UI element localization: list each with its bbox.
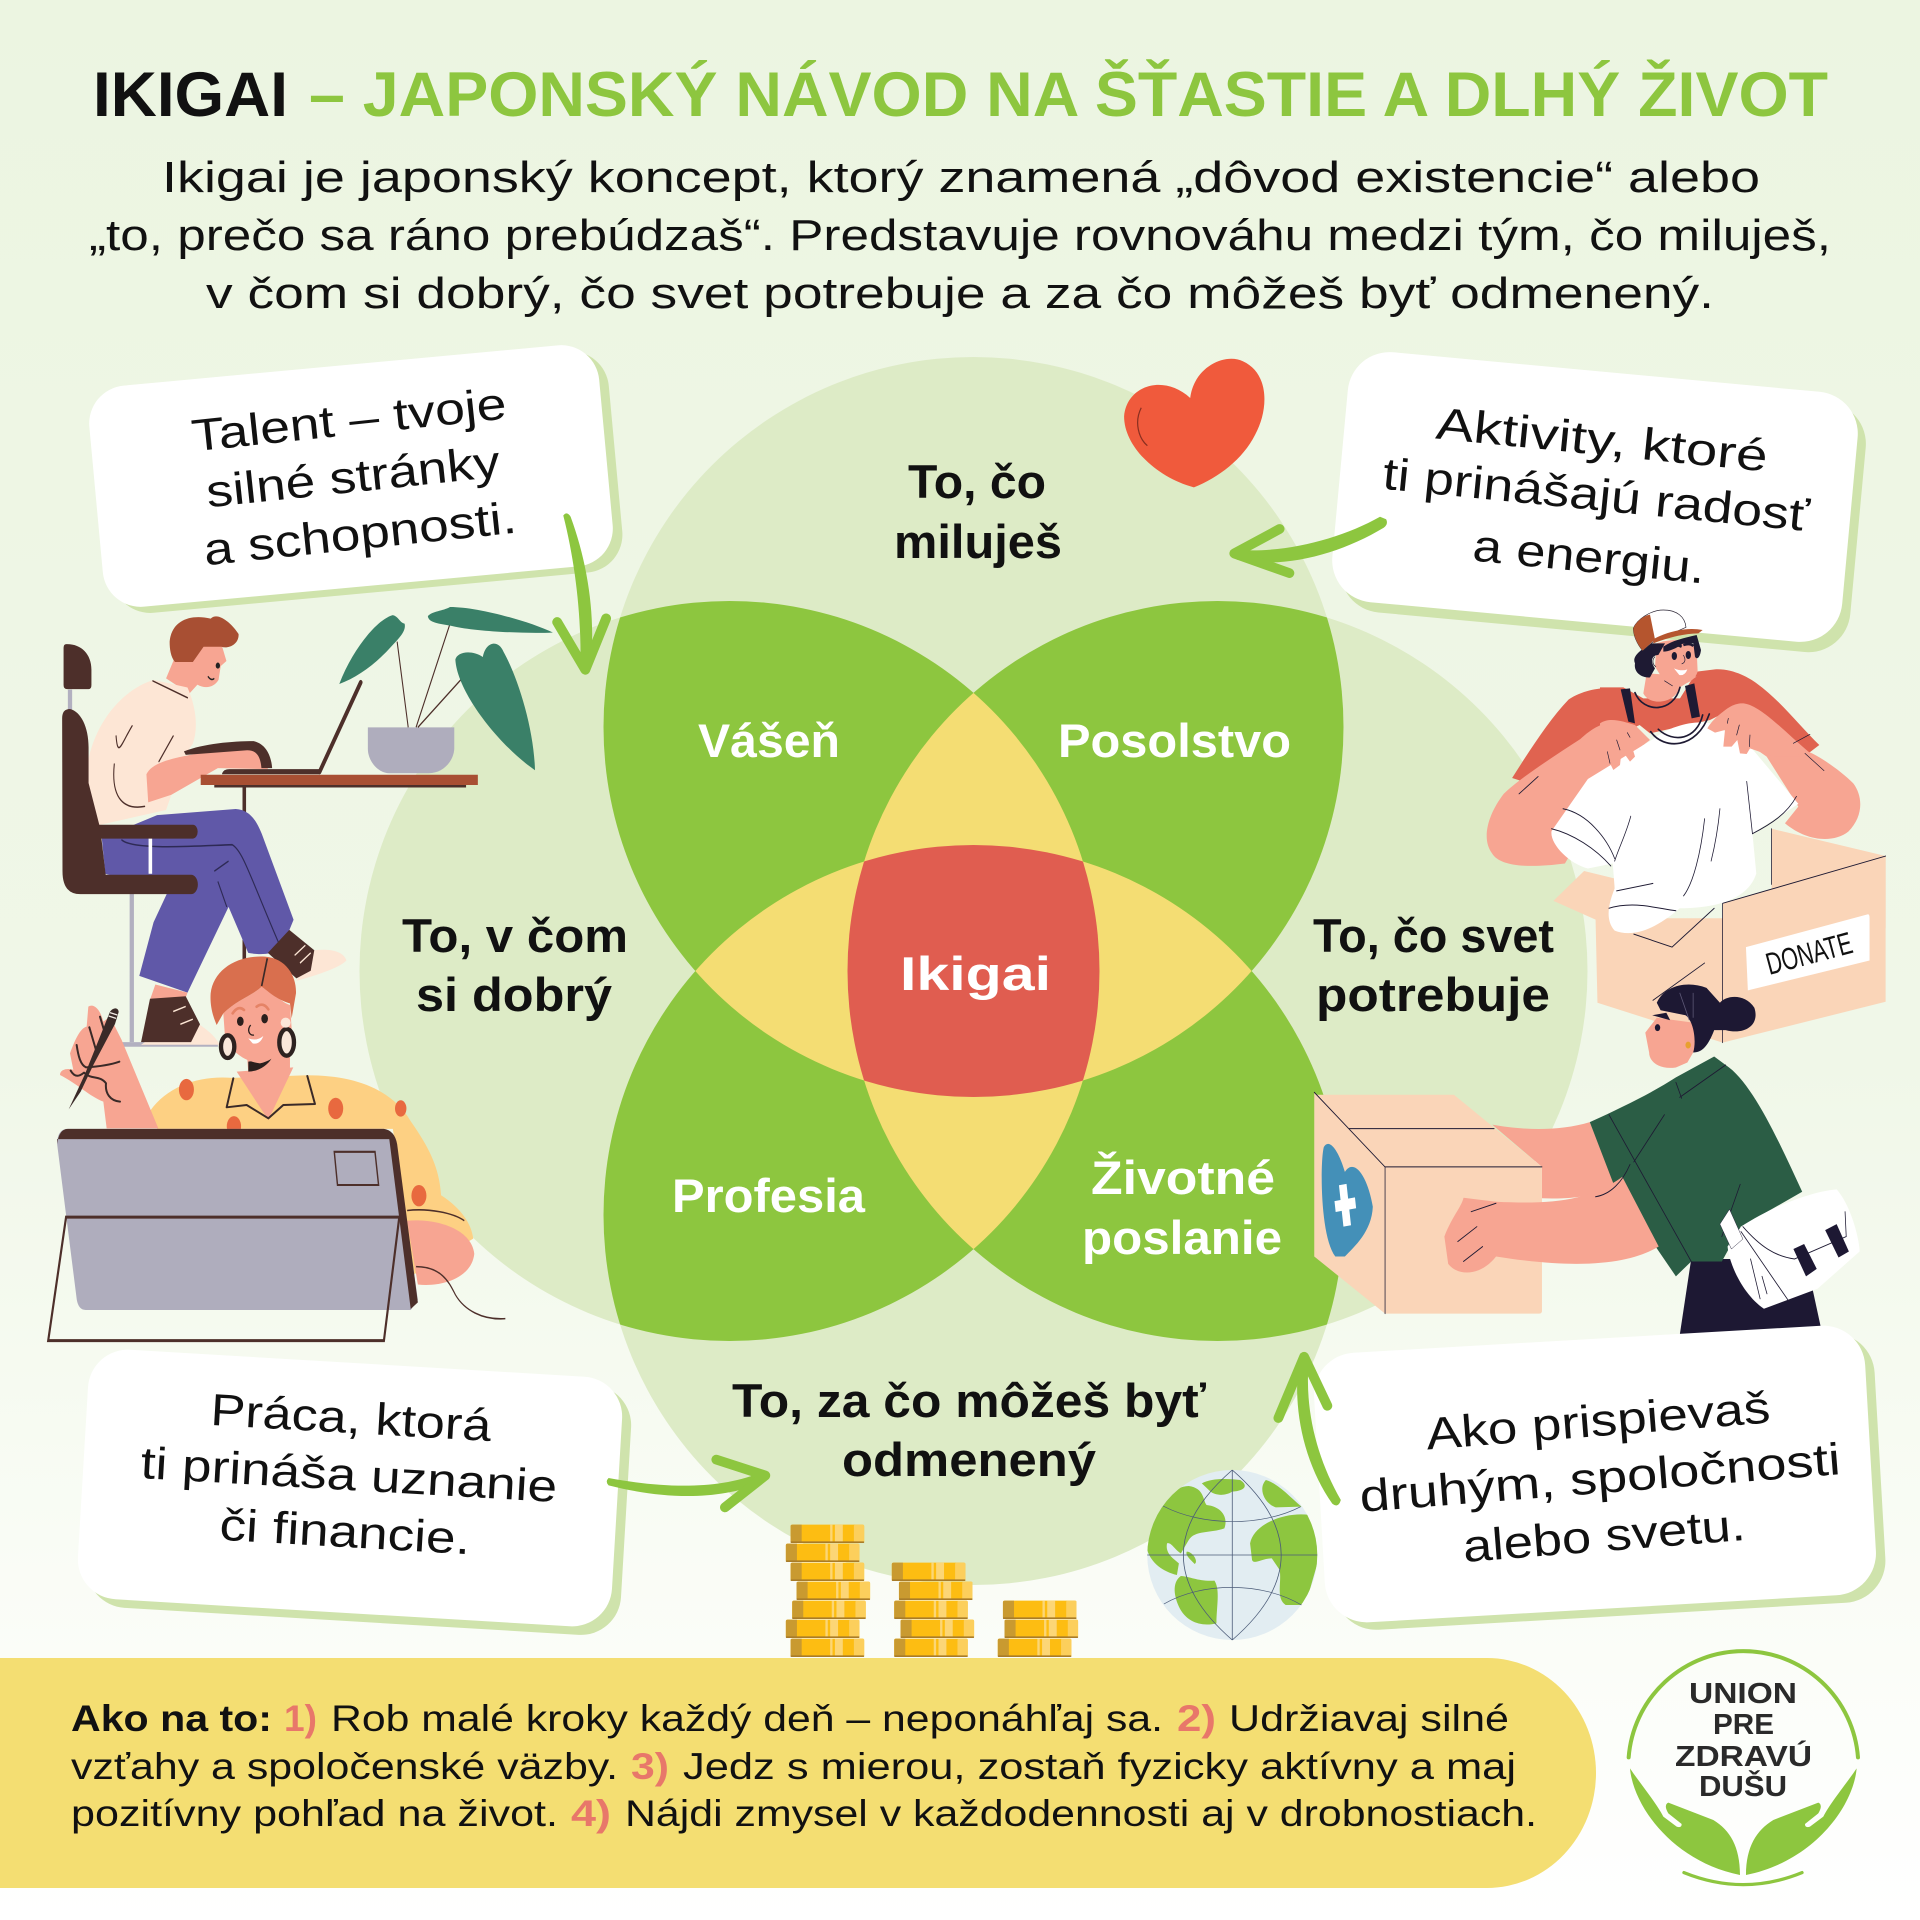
venn labels: To, v čom: [402, 909, 628, 962]
intro text: [89, 153, 1831, 318]
panel: tips: 3): [631, 1746, 669, 1787]
text: donate: DONATE: [1762, 925, 1856, 982]
illustration: head of man with cap: [1633, 610, 1703, 686]
venn labels: Vášeň: [698, 714, 840, 767]
intro text: Ikigai je japonský koncept, ktorý znamená „dôvod existencie“ alebo: [162, 153, 1760, 202]
intro text: v čom si dobrý, čo svet potrebuje a za čo môžeš byť odmenený.: [206, 269, 1714, 318]
venn labels: odmenený: [842, 1433, 1096, 1486]
panel: tips: Ako na to:: [71, 1698, 272, 1739]
arrow: activities: [1234, 517, 1387, 573]
card: contribution: Ako prispievaš: [1424, 1382, 1772, 1459]
logo: ZDRAVÚ: [1675, 1739, 1812, 1773]
panel: tips: Nájdi zmysel v každodennosti aj v drobnostiach.: [625, 1793, 1537, 1834]
icon: globe: [1147, 1470, 1321, 1640]
venn labels: Posolstvo: [1058, 714, 1291, 767]
icon: heart: [1124, 359, 1264, 487]
venn diagram: [360, 357, 1588, 1585]
card: work: Práca, ktorá: [209, 1384, 494, 1451]
card: talent: Talent – tvoje: [189, 378, 509, 461]
panel: tips: pozitívny pohľad na život.: [71, 1793, 558, 1834]
card: activities: ti prinášajú radosť: [1381, 448, 1813, 541]
card: work: [76, 1347, 633, 1637]
card: activities: [1329, 348, 1870, 656]
venn labels: miluješ: [894, 515, 1062, 568]
card: work: ti prináša uznanie: [139, 1437, 559, 1512]
logo: DUŠU: [1699, 1769, 1787, 1803]
logo: UNION: [1689, 1678, 1797, 1710]
venn labels: potrebuje: [1316, 968, 1550, 1021]
illustration: box with T-shirt and man: [1487, 669, 1886, 1043]
panel: tips: vzťahy a spoločenské väzby.: [71, 1746, 618, 1787]
arrow: talent: [557, 513, 606, 670]
venn labels: si dobrý: [416, 968, 612, 1021]
illustration: man at desk with plant: [62, 607, 553, 1047]
panel: tips: [0, 1658, 1596, 1888]
venn labels: Ikigai: [900, 947, 1051, 1000]
venn labels: poslanie: [1082, 1211, 1282, 1264]
card: contribution: alebo svetu.: [1461, 1499, 1747, 1572]
card: talent: [86, 342, 626, 616]
card: work: či financie.: [218, 1499, 472, 1564]
icon: coins: [786, 1525, 1078, 1657]
card: activities: a energiu.: [1471, 520, 1708, 593]
venn labels: Životné: [1091, 1151, 1275, 1204]
panel: tips: Rob malé kroky každý deň – neponáhľaj sa.: [331, 1698, 1163, 1739]
arrow: work: [607, 1460, 765, 1507]
venn labels: To, čo: [908, 455, 1046, 508]
arrow: contribution: [1278, 1357, 1341, 1505]
card: contribution: druhým, spoločnosti: [1358, 1433, 1842, 1522]
panel: tips: 2): [1177, 1698, 1216, 1739]
panel: tips: 4): [571, 1793, 611, 1834]
logo: [1629, 1651, 1858, 1885]
venn labels: To, čo svet: [1313, 909, 1554, 962]
illustration: woman with tablet: [48, 957, 505, 1341]
panel: tips: Udržiavaj silné: [1229, 1698, 1509, 1739]
intro text: „to, prečo sa ráno prebúdzaš“. Predstavuje rovnováhu medzi tým, čo miluješ,: [89, 211, 1831, 260]
title: – JAPONSKÝ NÁVOD NA ŠŤASTIE A DLHÝ ŽIVOT: [309, 59, 1828, 130]
card: activities: Aktivity, ktoré: [1434, 398, 1770, 481]
venn labels: To, za čo môžeš byť: [732, 1374, 1207, 1427]
venn labels: Profesia: [672, 1169, 866, 1222]
title: IKIGAI: [93, 60, 288, 130]
logo: PRE: [1713, 1709, 1774, 1741]
card: talent: a schopnosti.: [201, 492, 519, 575]
venn labels: [402, 455, 1554, 1486]
illustration: woman giving box: [1314, 985, 1860, 1335]
card: talent: silné stránky: [204, 436, 503, 517]
panel: tips: 1): [284, 1698, 317, 1739]
card: contribution: [1312, 1323, 1888, 1632]
panel: tips: Jedz s mierou, zostaň fyzicky aktívny a maj: [683, 1746, 1516, 1787]
